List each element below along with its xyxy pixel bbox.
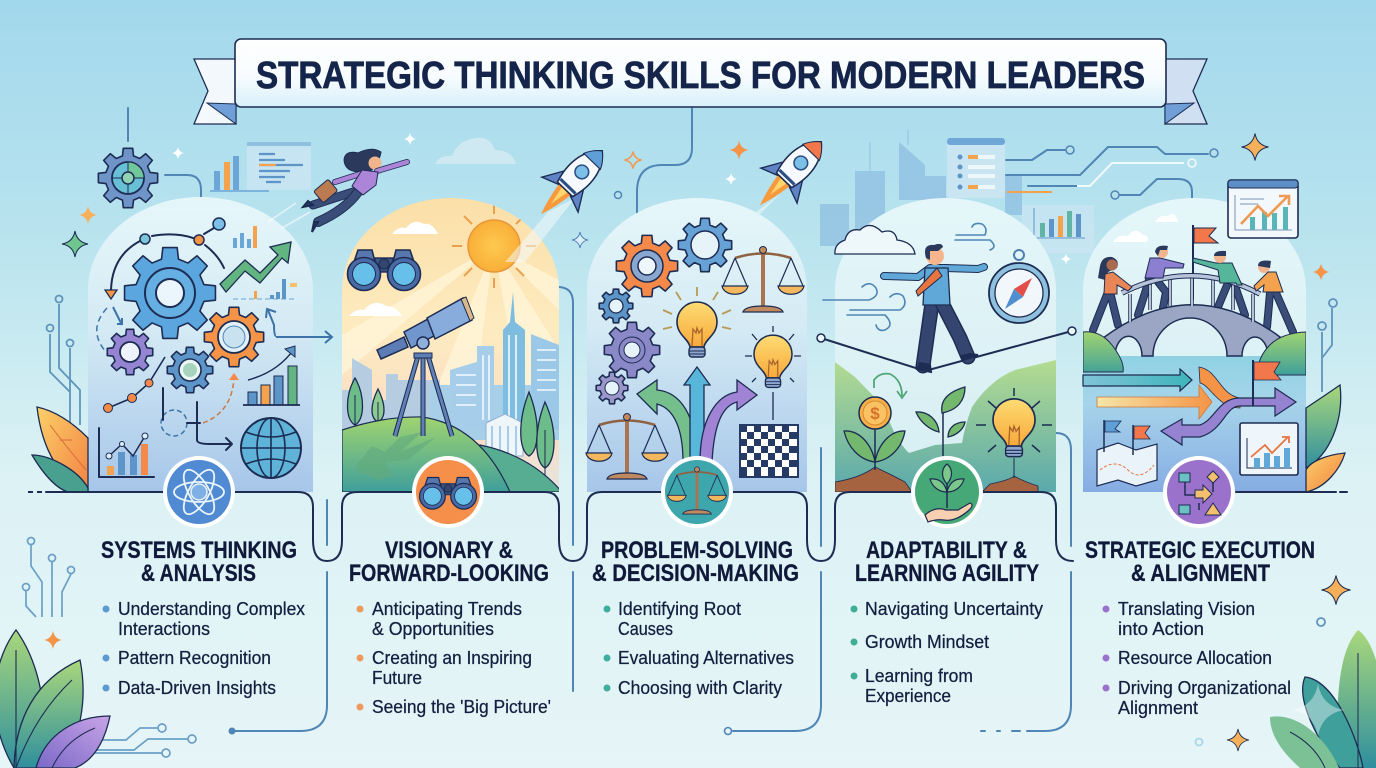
water and shores <box>1083 356 1306 492</box>
bullets: Experience <box>865 686 951 706</box>
connector: flowing stem lines <box>128 108 1071 734</box>
arrows converging <box>1083 360 1296 445</box>
heading: LEARNING AGILITY <box>855 560 1039 587</box>
bullets: Identifying Root <box>618 599 741 619</box>
banner body <box>235 39 1166 107</box>
flying woman with briefcase <box>268 149 407 232</box>
bullets: Causes <box>618 619 673 639</box>
title: STRATEGIC THINKING SKILLS FOR MODERN LEADERS <box>256 55 1145 97</box>
dark outlined leaf <box>1303 677 1363 768</box>
column: problem solving text <box>592 537 799 698</box>
bottom right leaves <box>1270 630 1376 768</box>
cloud <box>835 225 915 254</box>
green trend arrow <box>220 242 291 292</box>
bullets: Resource Allocation <box>1118 648 1272 668</box>
mini bar charts <box>233 226 297 299</box>
back hill <box>479 444 559 492</box>
bullets <box>1102 599 1291 718</box>
panel: problem solving illustration <box>586 198 807 492</box>
bullets <box>604 599 794 698</box>
column: strategic execution text <box>1085 537 1315 718</box>
chessboard <box>740 425 798 477</box>
rocket trails <box>505 192 782 262</box>
bottom left circuits <box>22 538 196 757</box>
bullets: Future <box>372 668 422 688</box>
icon: atom <box>163 456 235 528</box>
column: systems thinking text <box>101 537 305 698</box>
bar chart <box>243 346 300 405</box>
bullets: Navigating Uncertainty <box>865 599 1043 619</box>
sun <box>452 204 536 288</box>
banner folds <box>207 103 1194 124</box>
right circuit decoration <box>1318 299 1337 392</box>
top left gear <box>98 148 158 208</box>
bullets: Growth Mindset <box>865 632 989 652</box>
bullets: Alignment <box>1118 698 1198 718</box>
team flag <box>1193 225 1218 300</box>
chart window top right <box>1228 180 1298 238</box>
purple gear <box>107 329 153 375</box>
column: adaptability text <box>850 537 1043 706</box>
city and dashboard backdrop <box>820 130 1094 253</box>
tightrope <box>817 327 1076 371</box>
light bulb small <box>745 326 801 420</box>
bullets <box>356 599 551 717</box>
bullets: Learning from <box>865 666 973 686</box>
right leaves <box>1306 385 1345 492</box>
title banner <box>194 39 1207 124</box>
heading: SYSTEMS THINKING <box>101 537 297 564</box>
bullets: Choosing with Clarity <box>618 678 782 698</box>
bullets: & Opportunities <box>372 619 494 639</box>
panel: adaptability illustration <box>817 198 1076 492</box>
icon: binoculars <box>412 456 484 528</box>
clouds small <box>1113 214 1178 242</box>
orange gear <box>204 307 264 367</box>
telescope shadow <box>356 432 436 480</box>
bullets: Data-Driven Insights <box>118 678 276 698</box>
front hill <box>342 417 510 492</box>
panel: systems thinking illustration <box>88 197 332 492</box>
line graph <box>104 357 165 412</box>
network arc with nodes <box>105 218 225 299</box>
binoculars <box>348 250 420 290</box>
heading: ADAPTABILITY & <box>866 537 1027 564</box>
heading: STRATEGIC EXECUTION <box>1085 537 1315 564</box>
baseline connector with U-bends <box>28 492 1347 561</box>
balance scale top <box>722 246 804 312</box>
clouds <box>349 222 438 316</box>
large blue gear <box>125 248 215 338</box>
bullets: Translating Vision <box>1118 599 1255 619</box>
panel background arch <box>88 197 313 492</box>
coin plant: $ <box>870 404 880 423</box>
bullets: Evaluating Alternatives <box>618 648 794 668</box>
heading: & ALIGNMENT <box>1131 560 1270 587</box>
figures behind rail <box>1093 277 1293 332</box>
man balancing on rope <box>884 244 984 372</box>
icon: flowchart <box>1163 456 1235 528</box>
rocket one <box>523 133 620 232</box>
shores <box>1083 332 1306 375</box>
decision arrows <box>637 367 757 462</box>
sun rays beams <box>342 258 559 385</box>
bullets <box>102 599 305 698</box>
panel background arch <box>587 198 807 492</box>
hills and soil <box>835 360 1056 492</box>
map with flags <box>1097 420 1157 486</box>
banner tails <box>194 59 1207 124</box>
heading: & ANALYSIS <box>141 560 256 587</box>
city skyline <box>342 292 559 456</box>
seedling <box>916 387 965 456</box>
panel background arch <box>835 198 1056 492</box>
panel: visionary illustration <box>342 198 562 492</box>
coin plant <box>844 374 907 470</box>
circuit lines top right <box>1006 146 1218 199</box>
connector: top center line <box>637 108 692 224</box>
light bulb <box>976 388 1052 478</box>
watermark sparkle <box>1292 684 1344 736</box>
telescope <box>377 297 474 436</box>
heading: & DECISION-MAKING <box>592 560 799 587</box>
floating bars and code window <box>210 142 311 191</box>
growth chart card <box>1240 423 1298 475</box>
bullets: Seeing the 'Big Picture' <box>372 697 551 717</box>
bullets: Creating an Inspiring <box>372 648 532 668</box>
panel background arch <box>1083 198 1306 492</box>
heading <box>855 537 1039 587</box>
bottom left leaves <box>0 630 110 768</box>
heading <box>1085 537 1315 587</box>
heading: FORWARD-LOOKING <box>349 560 549 587</box>
left leaves <box>32 407 88 492</box>
cloud top <box>435 138 516 164</box>
trees right <box>521 392 554 475</box>
heading: PROBLEM-SOLVING <box>601 537 793 564</box>
bullets: Interactions <box>118 619 210 639</box>
bullets: Understanding Complex <box>118 599 305 619</box>
globe <box>241 418 301 478</box>
bullets: into Action <box>1118 619 1204 639</box>
circuit decoration left <box>46 296 80 435</box>
front light leaf <box>1270 716 1339 768</box>
heading <box>101 537 297 587</box>
bullets: Pattern Recognition <box>118 648 271 668</box>
bullets <box>850 599 1043 706</box>
compass <box>989 250 1049 323</box>
balance scale bottom <box>586 414 668 479</box>
flow lines and dashed arrows <box>97 307 239 450</box>
gears cluster <box>596 218 732 404</box>
panel: strategic execution illustration <box>1083 198 1306 492</box>
combo chart <box>99 428 154 477</box>
bullets: Driving Organizational <box>1118 678 1291 698</box>
back leaf <box>1337 630 1376 768</box>
wind lines <box>823 223 994 330</box>
bullets: Anticipating Trends <box>372 599 522 619</box>
panel background arch <box>342 198 559 492</box>
heading <box>592 537 799 587</box>
rocket two <box>742 124 839 223</box>
stone bridge <box>1103 276 1280 356</box>
right arrow <box>266 309 332 343</box>
heading: VISIONARY & <box>385 537 513 564</box>
sparkles <box>44 133 1350 751</box>
trees left <box>348 378 384 428</box>
icon: scales <box>661 456 733 528</box>
small blue gear <box>167 347 213 393</box>
icon: plant in hand <box>911 456 983 528</box>
team on bridge <box>1098 246 1283 294</box>
heading <box>349 537 549 587</box>
light bulb large <box>663 287 731 357</box>
column: visionary text <box>349 537 551 717</box>
